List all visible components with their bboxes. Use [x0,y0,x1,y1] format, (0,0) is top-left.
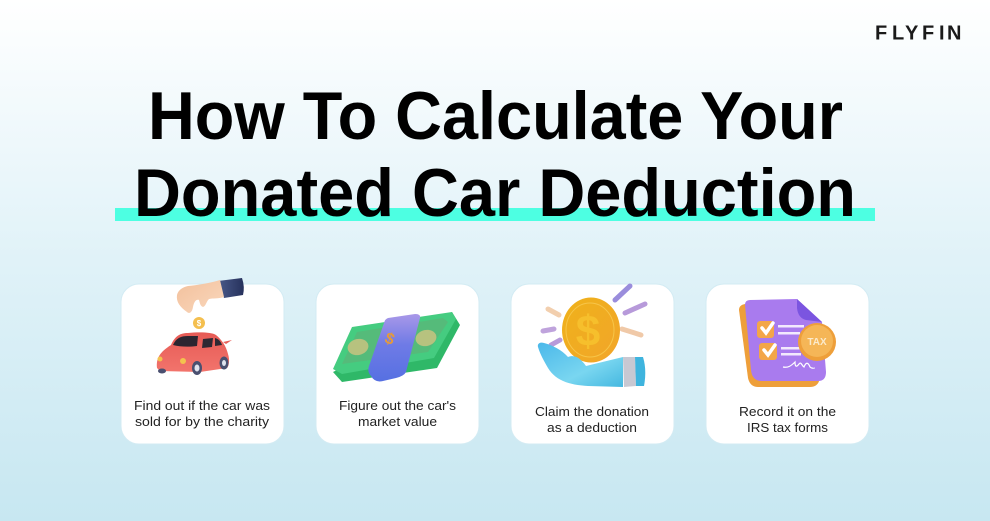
title: Donated Car Deduction [134,155,856,231]
caption 4: IRS tax forms [747,420,829,435]
caption 4 [739,404,836,435]
title highlight bar [115,208,875,221]
caption 1: sold for by the charity [135,414,270,429]
icon: hand holding gold coin with rays: $ [576,307,600,356]
card 3 background [511,284,674,444]
caption 3 [535,404,649,435]
logo: FLYFIN: FLYFIN [875,22,961,44]
panel: step 3 claim deduction [511,284,674,444]
caption 1 [134,398,271,429]
title [134,78,856,231]
panel: step 4 IRS tax forms [706,284,869,444]
panel: step 2 market value [316,284,479,444]
caption 2: Figure out the car's [339,398,457,413]
caption 1: Find out if the car was [134,398,271,413]
caption 3: as a deduction [547,420,637,435]
icon: hand dropping coin over red car [157,278,244,375]
card 1 background [121,284,284,444]
caption 2: market value [358,414,437,429]
icon: tax document with checkboxes and TAX coin [739,299,836,387]
icon: banded stack of cash: $ [382,330,397,349]
icon: hand dropping coin over red car: $ [197,319,202,328]
icon: hand holding gold coin with rays [538,286,645,387]
card 2 background [316,284,479,444]
caption 2 [339,398,457,429]
panel: step 1 car sold by charity [121,278,284,444]
icon: banded stack of cash [333,312,460,382]
caption 3: Claim the donation [535,404,649,419]
caption 4: Record it on the [739,404,836,419]
icon: tax document with checkboxes and TAX coin: TAX [807,337,827,348]
card 4 background [706,284,869,444]
title: How To Calculate Your [148,78,843,154]
